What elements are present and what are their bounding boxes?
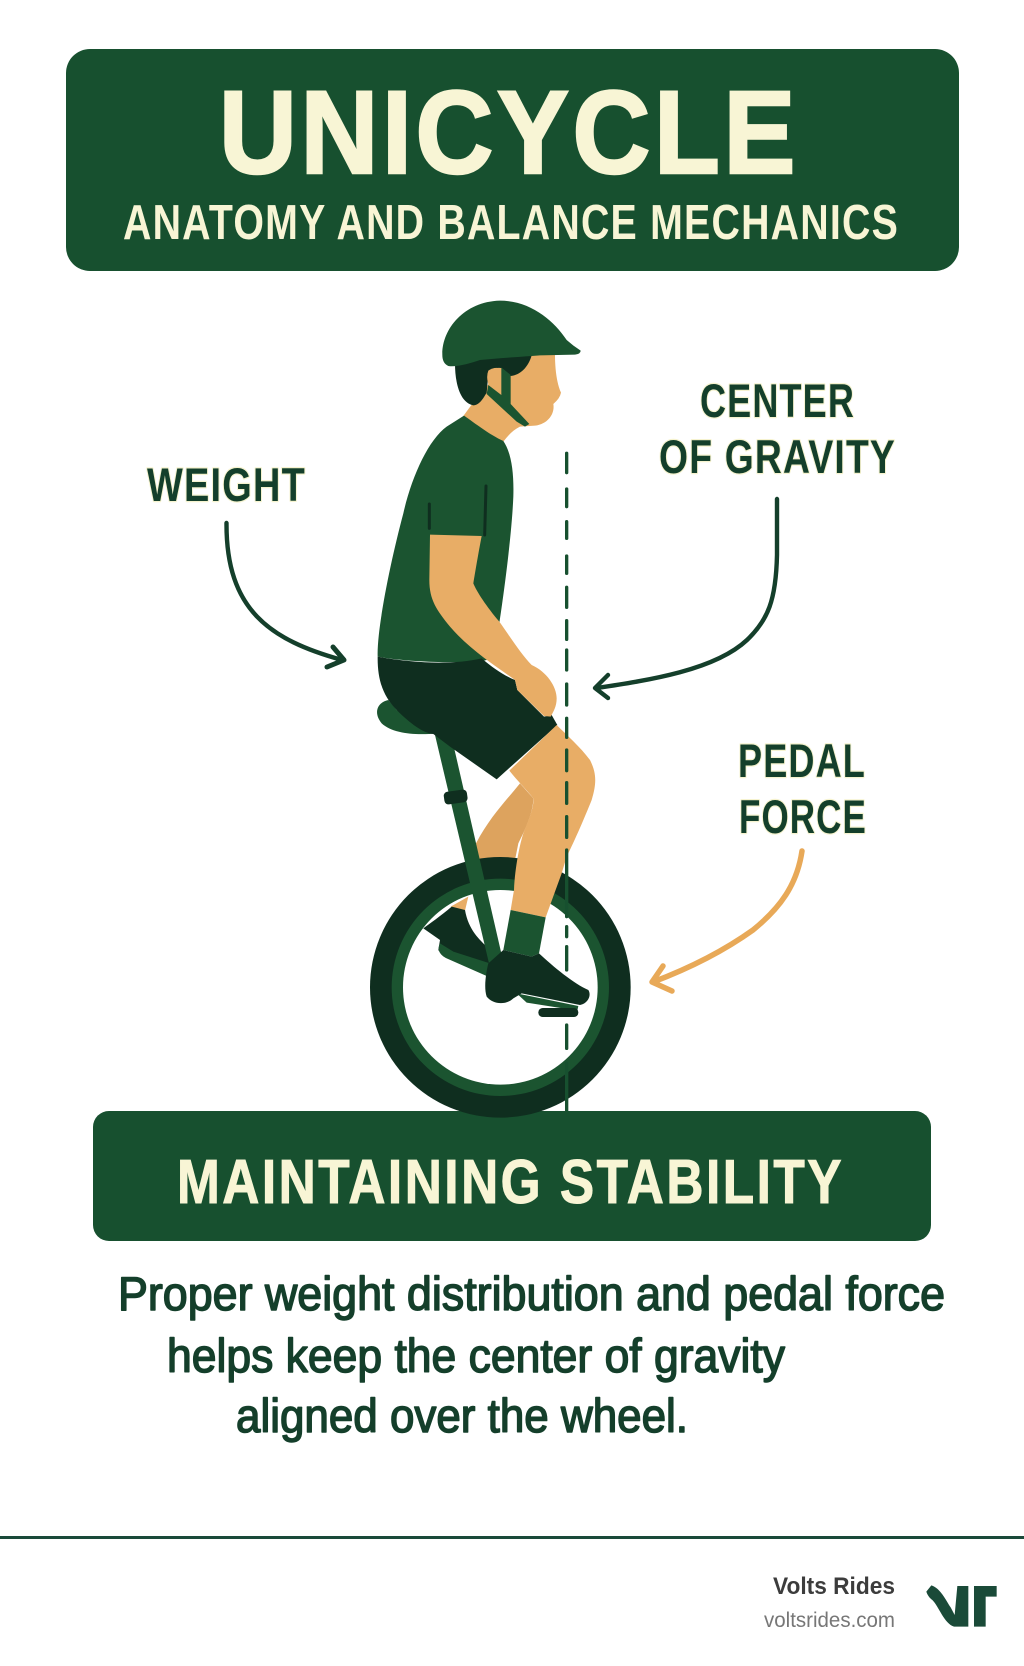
arrow: weight [226,523,344,667]
footer brand name: Volts Rides [773,1573,895,1600]
seat post clamp [443,789,468,805]
body text [118,1267,945,1442]
wheel [370,857,631,1118]
body text: aligned over the wheel. [236,1389,688,1442]
stability heading: MAINTAINING STABILITY [177,1148,844,1217]
footer divider [0,1536,1024,1539]
sock [503,910,546,957]
label: pedal force [738,734,867,843]
rear pedal [439,943,490,976]
helmet strap [487,367,529,427]
ear [487,368,501,394]
label: center of gravity [659,374,896,483]
seat post [435,735,501,963]
rear shoe [423,907,490,975]
hair [455,355,532,405]
shirt creases [429,486,486,535]
center of gravity line [562,453,572,1112]
front shoe [485,950,590,1005]
panel: header [66,49,959,271]
label: pedal force: FORCE [739,790,867,843]
stability background [93,1111,931,1241]
arm [429,535,557,717]
shirt [378,416,513,662]
rear ankle [451,897,468,911]
label: center of gravity: OF GRAVITY [659,430,896,483]
helmet [442,301,581,366]
footer url: voltsrides.com [764,1609,895,1632]
panel: maintaining stability [93,1111,931,1241]
head and neck [463,355,561,442]
body text: helps keep the center of gravity [167,1329,785,1382]
label: pedal force: PEDAL [738,734,866,787]
arrow: center of gravity [595,499,777,698]
front pedal [517,993,578,1017]
front leg [509,725,595,917]
header background [66,49,959,271]
rear leg [476,783,533,860]
icon: logo [926,1585,997,1627]
label: center of gravity: CENTER [700,374,855,427]
label: weight: WEIGHT [147,458,306,511]
seat [377,700,437,734]
body text: Proper weight distribution and pedal force [118,1267,945,1320]
illustration: unicycle rider [370,301,631,1118]
shorts [378,657,557,779]
title: UNICYCLE [219,67,799,199]
arrow: pedal force [652,851,802,991]
